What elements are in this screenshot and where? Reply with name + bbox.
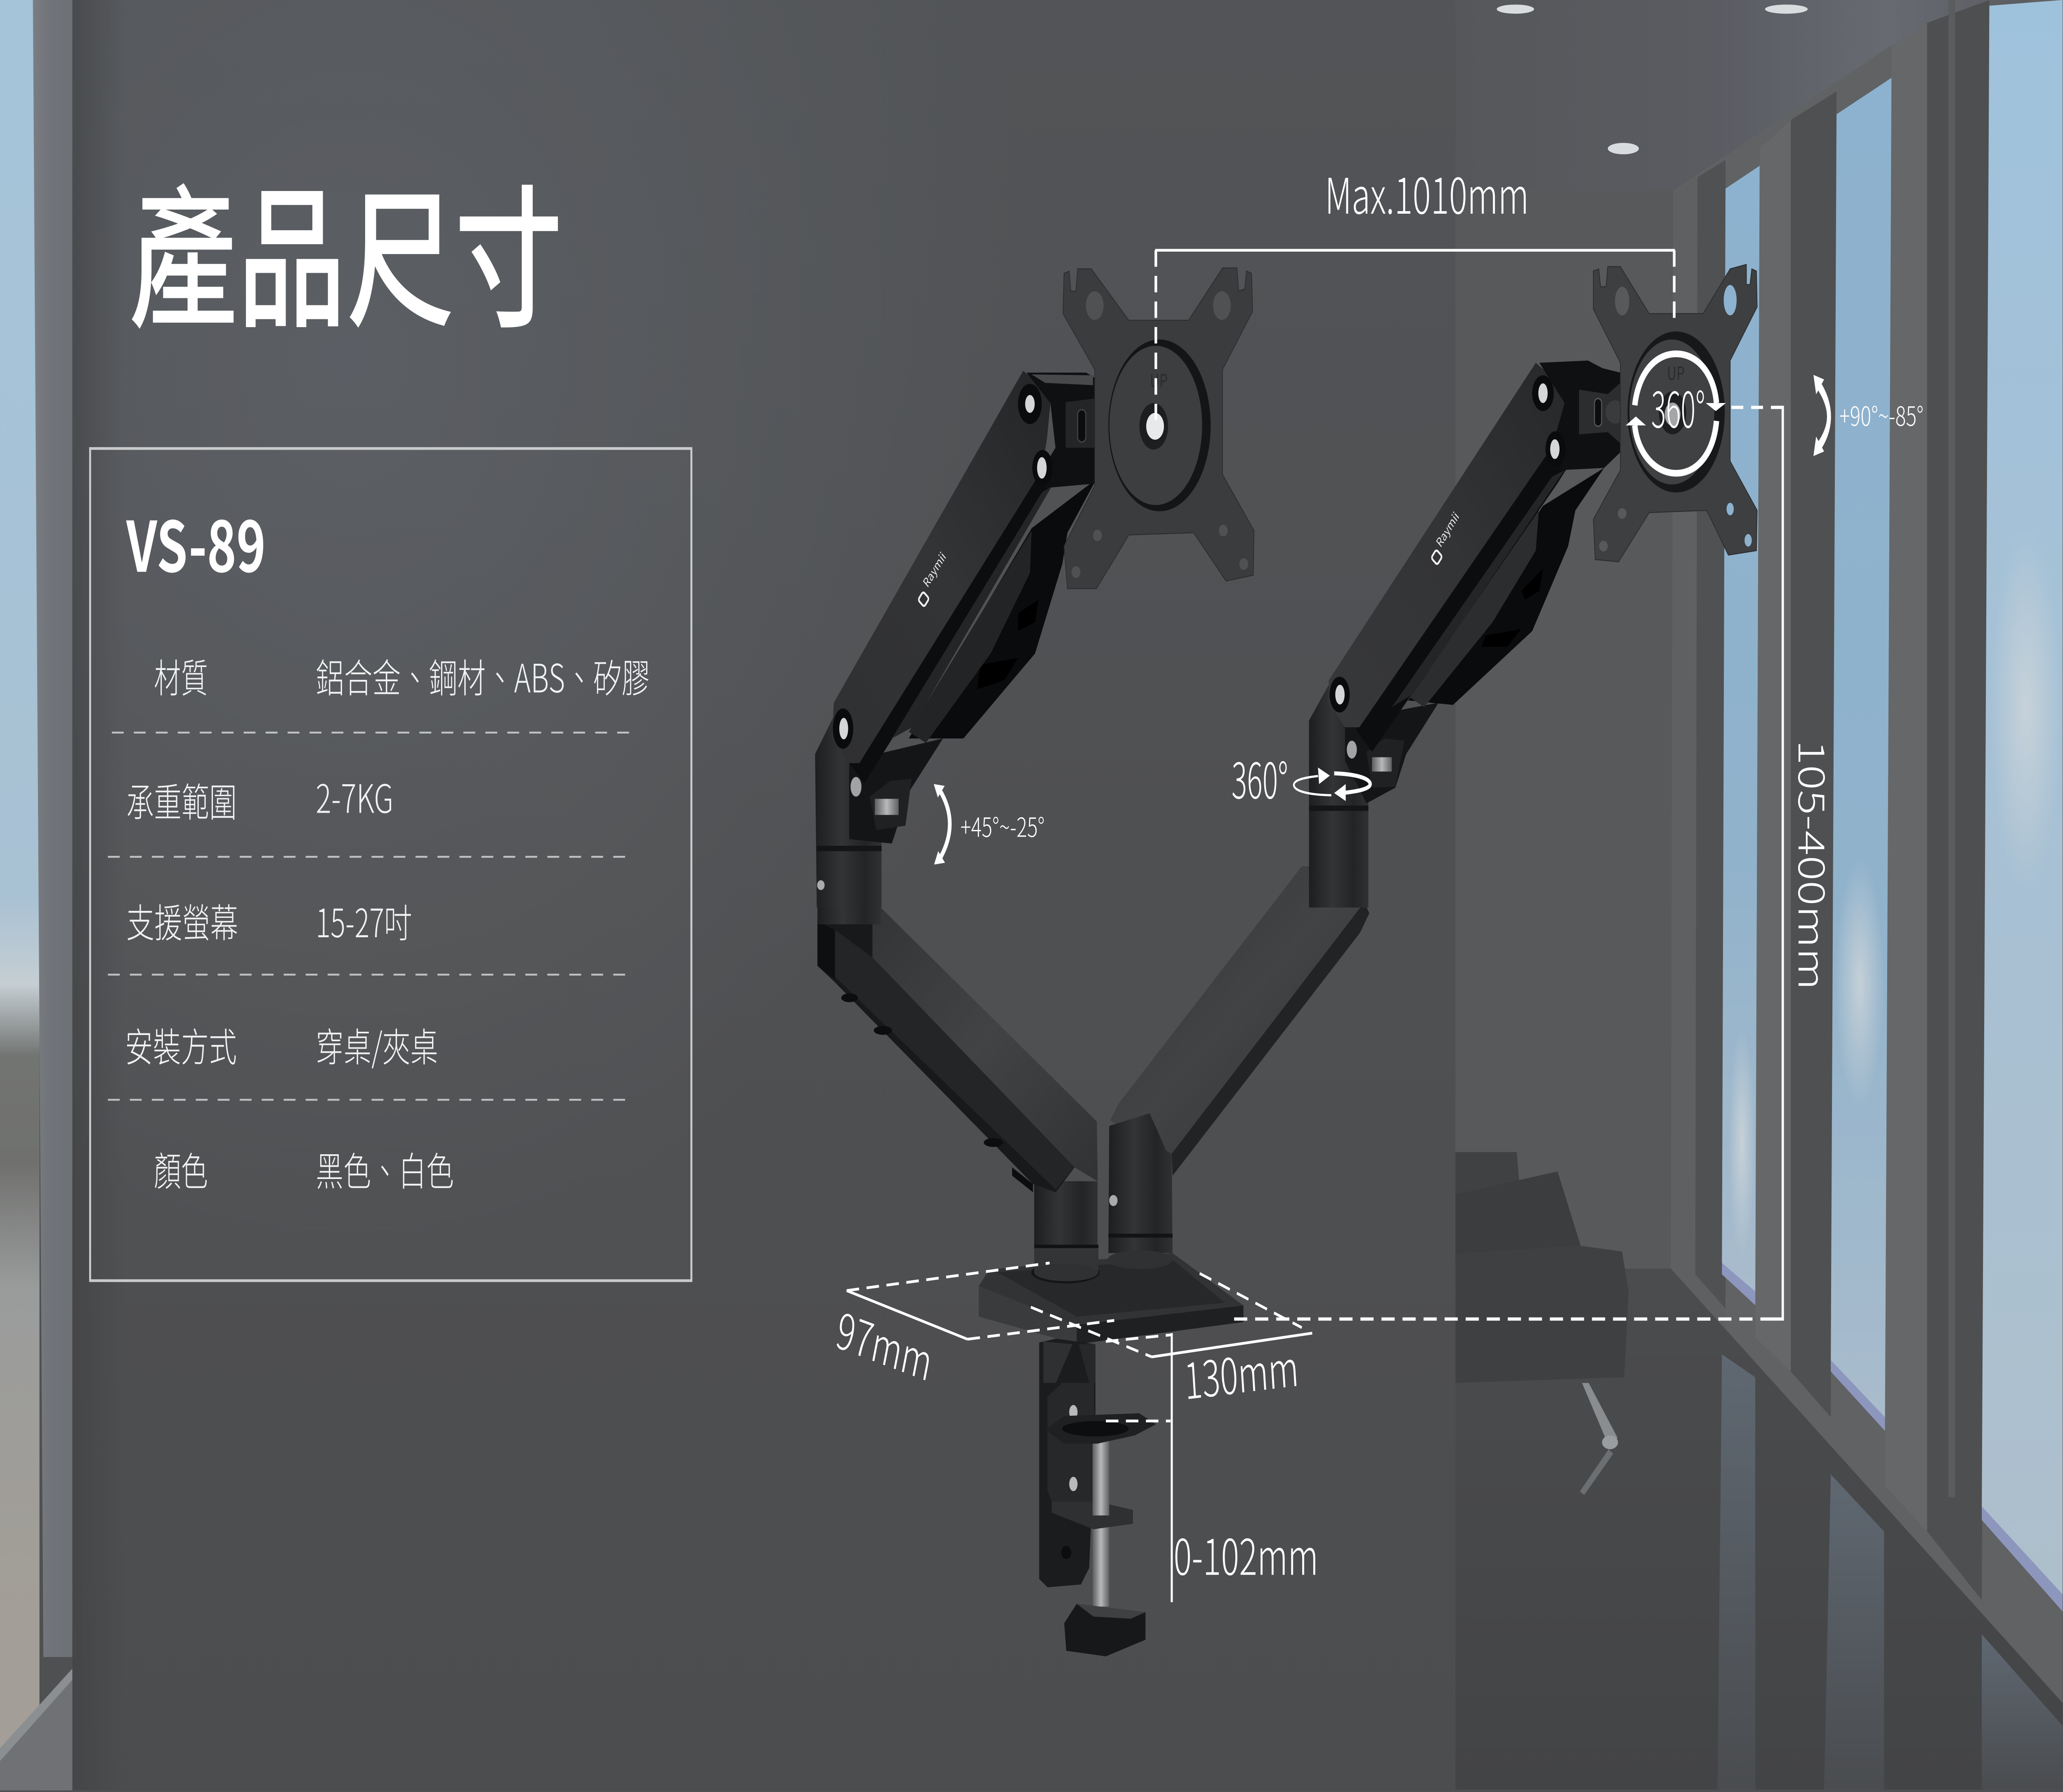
lower arms and base — [817, 863, 1369, 1656]
row: load range: 2-7KG — [316, 768, 393, 824]
row: supported screen: 支援螢幕 — [126, 892, 238, 948]
left post — [1031, 1181, 1100, 1283]
brand logo on left arm — [918, 547, 949, 607]
dimension: base depth 97mm — [831, 1263, 1114, 1396]
head joint — [1539, 361, 1624, 470]
clamp top pad — [1046, 1413, 1156, 1444]
sofa — [1455, 1152, 1629, 1495]
row: material: 材質 — [154, 647, 208, 704]
VESA plate — [1063, 268, 1254, 589]
brand logo on right arm: Raymii — [1433, 507, 1462, 550]
wall overlay — [72, 0, 1456, 1790]
hinge — [1345, 703, 1439, 803]
arm face panel — [1329, 363, 1565, 727]
rotation arrow ring: arm 360 — [1294, 768, 1370, 801]
dimension: base width 130mm: 130mm — [1182, 1329, 1301, 1414]
embossed UP mark on left plate: UP — [1150, 366, 1168, 393]
model name: VS-89 — [126, 492, 266, 592]
row: colour: 黑色、白色 — [316, 1140, 454, 1197]
embossed UP mark on right plate: UP — [1667, 359, 1685, 386]
dimension: clamp thickness: 0-102mm — [1173, 1518, 1318, 1589]
tilt arrow: left arm — [934, 784, 950, 865]
floor — [1455, 1269, 2063, 1790]
row: load range — [126, 768, 393, 828]
gas spring cover — [909, 479, 1096, 743]
right corridor with windows — [1455, 0, 2063, 1790]
arm face panel — [832, 371, 1050, 763]
tilt arrow: right plate — [1813, 375, 1829, 456]
black strip — [849, 470, 1057, 783]
right post — [1107, 1113, 1173, 1269]
dimension: clamp thickness — [1106, 1333, 1318, 1602]
row: material — [154, 647, 650, 704]
elbow post — [1309, 685, 1369, 908]
clamp bracket — [1052, 1502, 1133, 1529]
title: 產品尺寸 — [129, 137, 563, 359]
pivots — [833, 384, 1053, 749]
label: arm rotation: 360° — [1232, 742, 1288, 813]
row: material: 鋁合金、鋼材、ABS、矽膠 — [316, 647, 650, 704]
panel: specifications — [90, 448, 692, 1280]
row: load range: 承重範圍 — [126, 771, 237, 828]
dimension: base width 130mm — [1031, 1273, 1312, 1414]
head joint — [1027, 373, 1096, 488]
row: supported screen: 15-27吋 — [316, 892, 412, 948]
left window and frame — [0, 0, 83, 1790]
dimension: base depth 97mm: 97mm — [831, 1292, 939, 1396]
clamp knob — [1064, 1604, 1145, 1656]
dimension: max reach: Max.1010mm — [1325, 157, 1529, 229]
black strip — [1356, 452, 1570, 752]
clamp screw — [1093, 1441, 1109, 1607]
hinge — [849, 738, 943, 844]
base plate — [979, 1253, 1244, 1344]
brand logo on left arm: Raymii — [919, 547, 949, 591]
pivots — [1329, 375, 1566, 712]
right lower arm — [1110, 866, 1369, 1176]
row: installation: 安裝方式 — [125, 1016, 237, 1073]
left upper arm and monitor plate — [815, 268, 1254, 908]
label: tilt range right: +90°~-85° — [1839, 395, 1924, 434]
table clamp — [1039, 1339, 1156, 1656]
dimension: height range: 105-400mm — [1788, 740, 1839, 990]
elbow post — [815, 716, 882, 908]
ceiling lights — [1497, 5, 1808, 154]
row: colour: 顏色 — [154, 1140, 208, 1197]
row: installation: 穿桌/夾桌 — [316, 1016, 438, 1073]
row: installation — [125, 1016, 438, 1073]
row: colour — [154, 1140, 454, 1197]
label: plate rotation: 360° — [1651, 371, 1705, 442]
row: supported screen — [126, 892, 412, 948]
gas spring cover — [1408, 468, 1604, 707]
rotation arrow ring: plate 360 — [1626, 354, 1726, 473]
left lower arm — [817, 863, 1098, 1192]
dimension: height range — [1234, 408, 1839, 1319]
right upper arm and monitor plate — [1309, 264, 1757, 908]
VESA plate — [1593, 264, 1757, 562]
label: tilt range left: +45°~-25° — [961, 806, 1045, 845]
sky clouds — [1729, 526, 2062, 1257]
